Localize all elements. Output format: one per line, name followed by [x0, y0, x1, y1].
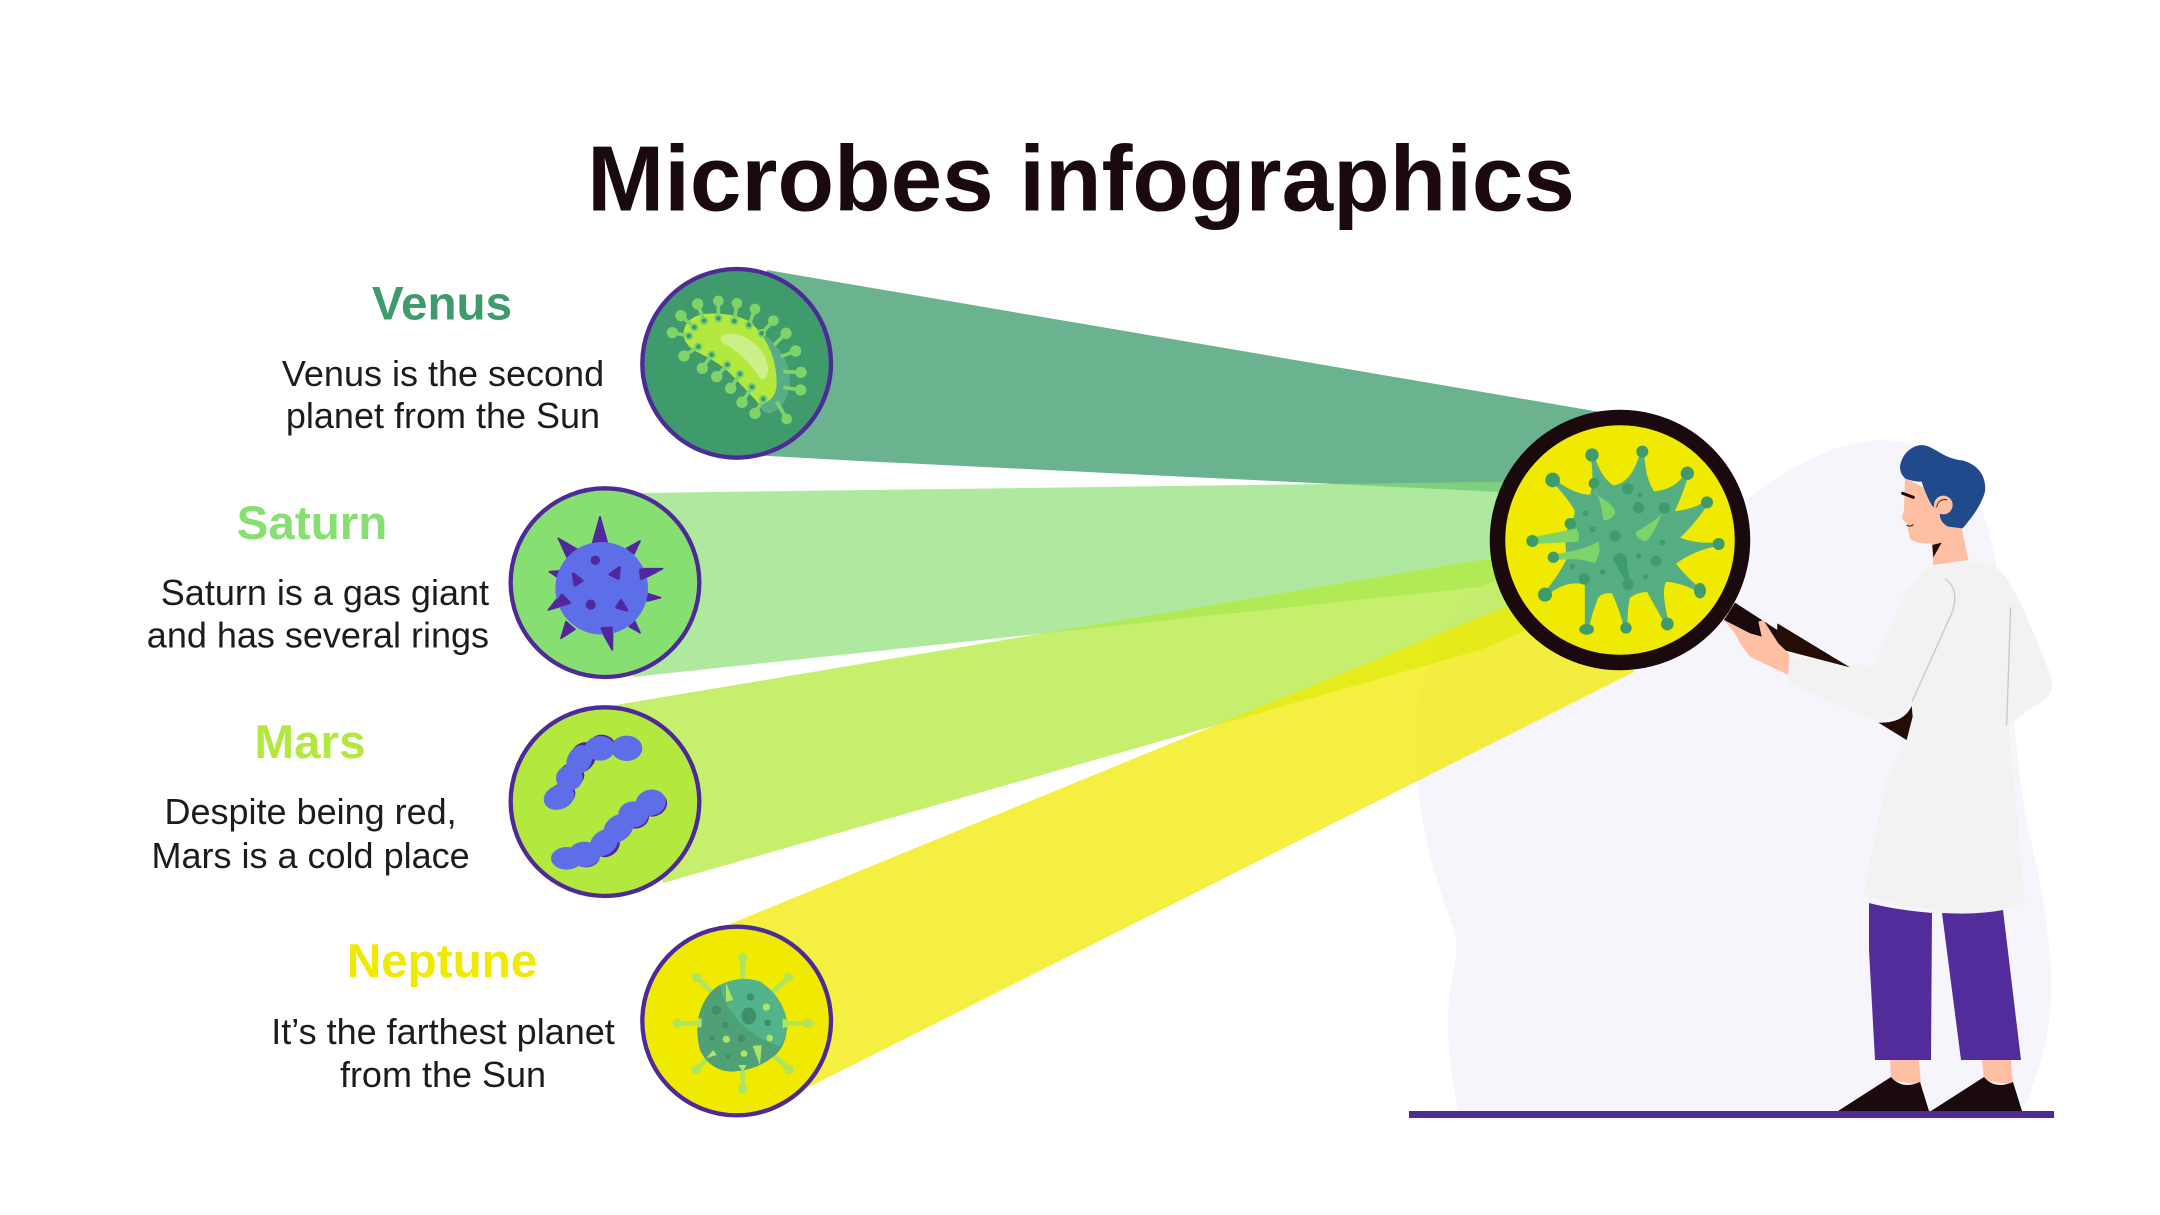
head	[1900, 445, 1985, 565]
handle	[1724, 603, 1850, 667]
icon: Mars microbe	[511, 707, 699, 896]
text block: Venus	[282, 278, 604, 436]
hand	[1724, 620, 1789, 675]
illustration: scientist	[1788, 445, 2052, 1111]
text block: Saturn: and has several rings	[147, 614, 489, 656]
text block: Neptune: It’s the farthest planet	[271, 1011, 615, 1052]
background blob	[1416, 440, 2051, 1112]
text block: Saturn	[147, 497, 489, 656]
beams	[610, 270, 1640, 1088]
text block: Mars: Mars is a cold place	[152, 835, 470, 876]
legs	[1838, 903, 2022, 1111]
lens	[1498, 418, 1742, 662]
text block: Venus: Venus is the second	[282, 353, 604, 394]
text block: Venus: planet from the Sun	[286, 395, 600, 436]
text block: Neptune	[271, 935, 615, 1095]
ground line	[1409, 1111, 2054, 1118]
armpit shadow	[1878, 706, 1913, 740]
text block: Mars	[152, 716, 470, 876]
text block: Saturn: Saturn is a gas giant	[161, 572, 489, 613]
magnifying glass	[1498, 418, 1850, 675]
beam: Mars	[610, 540, 1620, 883]
text block: Venus: Venus	[372, 278, 512, 331]
coat	[1788, 562, 2052, 913]
beam: Venus	[750, 270, 1640, 500]
beam: Saturn	[633, 480, 1620, 677]
text block: Mars: Mars	[254, 716, 366, 769]
text block: Neptune: Neptune	[347, 935, 537, 988]
beam: Neptune	[730, 570, 1634, 1088]
icon: Saturn microbe	[511, 488, 699, 677]
icon: central virus	[1526, 446, 1725, 635]
text block: Neptune: from the Sun	[340, 1054, 546, 1095]
text block: Mars: Despite being red,	[165, 791, 457, 832]
icon: Venus microbe	[642, 269, 831, 458]
text block: Saturn: Saturn	[237, 497, 387, 550]
title: Microbes infographics	[587, 126, 1575, 230]
icon: Neptune microbe	[642, 927, 831, 1115]
